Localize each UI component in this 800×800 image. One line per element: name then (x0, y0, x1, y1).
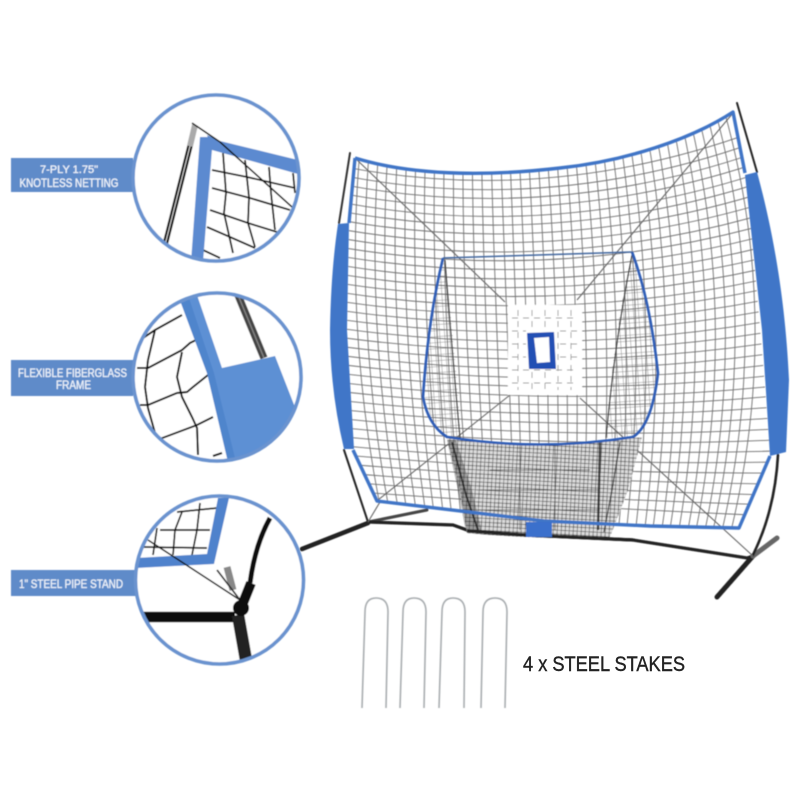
label bar: KNOTLESS NETTING (20, 178, 119, 190)
callout: knotless netting (11, 95, 299, 262)
strike zone white square (508, 305, 582, 395)
left sleeve (330, 223, 354, 449)
tension cords (355, 113, 753, 556)
target window (527, 332, 556, 369)
right sleeve (745, 172, 789, 456)
main product: batting net (302, 103, 789, 597)
pocket outline (423, 252, 658, 444)
netting mesh (345, 110, 775, 535)
label bar (11, 360, 133, 396)
steel stakes (362, 598, 507, 708)
callout: fiberglass frame (11, 293, 301, 470)
label bar (11, 158, 133, 192)
callout: steel pipe stand (11, 496, 304, 664)
detail circle (133, 293, 301, 470)
side walls of pocket (424, 253, 658, 438)
blue outer frame (349, 112, 770, 528)
label bar: FRAME (56, 380, 91, 392)
bottom tag (526, 522, 552, 537)
label bar: 1" STEEL PIPE STAND (19, 579, 123, 591)
label bar: 7-PLY 1.75" (40, 164, 98, 176)
infographic canvas (10, 92, 790, 708)
stakes caption: 4 x STEEL STAKES (523, 653, 685, 676)
catch pocket (447, 437, 642, 540)
stand frame (302, 103, 778, 597)
label bar: FLEXIBLE FIBERGLASS (18, 368, 127, 380)
detail circle (133, 95, 299, 262)
label bar (11, 570, 136, 596)
detail circle (136, 496, 304, 664)
